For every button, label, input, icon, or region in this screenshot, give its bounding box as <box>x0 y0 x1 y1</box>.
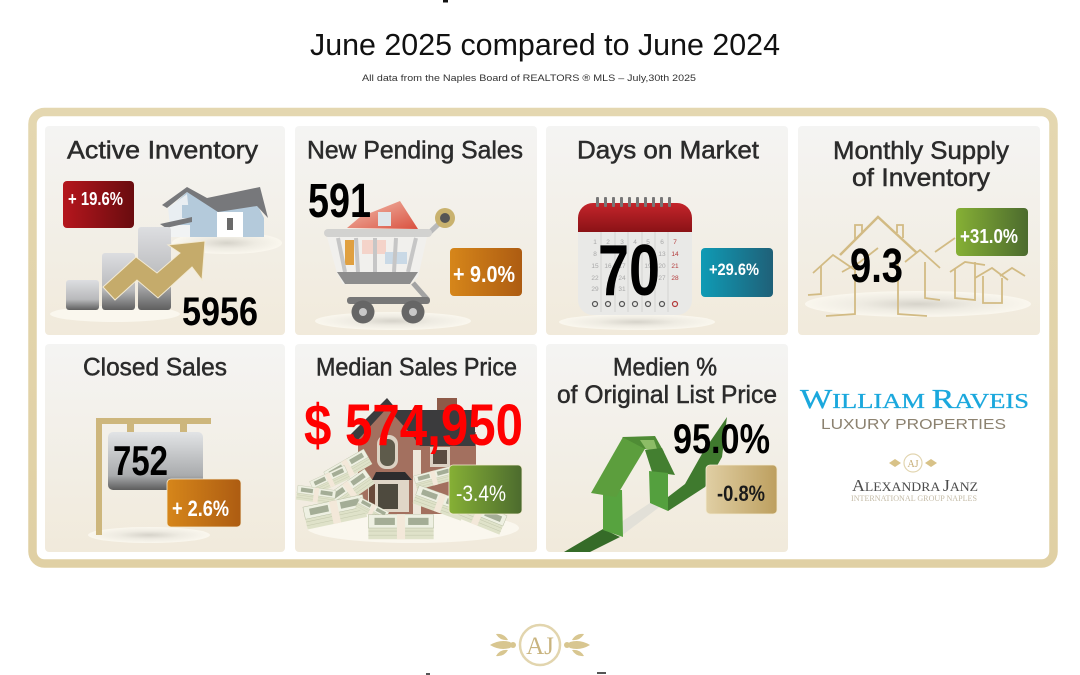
badge: change <box>167 479 241 527</box>
data source note: All data from the Naples Board of REALTORS ® MLS – July,30th 2025 <box>362 73 696 84</box>
badge: change: +29.6% <box>709 260 759 279</box>
icon: wall calendar: 28 <box>671 275 679 282</box>
badge: change: -3.4% <box>456 481 506 506</box>
logo: William Raveis: LUXURY PROPERTIES <box>821 416 1006 433</box>
title descender <box>443 0 448 2</box>
badge: change <box>63 181 134 228</box>
panel: median percent of original list price <box>546 344 788 552</box>
icon: wall calendar: 5 <box>646 239 650 246</box>
icon: wall calendar <box>559 197 715 330</box>
icon: wall calendar: 7 <box>673 239 677 246</box>
logo: Alexandra Janz: INTERNATIONAL GROUP NAPLES <box>851 494 977 503</box>
icon: wall calendar: 13 <box>658 251 666 258</box>
value: 95.0% <box>673 415 770 462</box>
value: 5956 <box>182 290 258 334</box>
logo: William Raveis <box>800 384 1029 433</box>
heading: Active Inventory <box>67 136 259 164</box>
icon: gold outlined houses <box>805 217 1031 317</box>
badge: change: -0.8% <box>717 481 765 506</box>
value: $ 574,950 <box>304 393 523 458</box>
panel: active inventory <box>45 126 285 335</box>
icon: wall calendar: 2 <box>606 239 610 246</box>
icon: wall calendar: 29 <box>591 286 599 293</box>
value: 591 <box>308 175 371 228</box>
icon: wall calendar: 20 <box>658 263 666 270</box>
icon: wall calendar: 19 <box>644 263 652 270</box>
badge: change <box>701 248 773 297</box>
icon: house with rising bars and arrow <box>50 187 282 322</box>
icon: wall calendar: 16 <box>604 263 612 270</box>
badge: change <box>956 208 1028 256</box>
icon: wall calendar: 3 <box>620 239 624 246</box>
icon: wall calendar: 27 <box>658 275 666 282</box>
value: 70 <box>598 231 660 311</box>
heading: of Original List Price <box>557 381 777 409</box>
heading: Median Sales Price <box>316 354 517 382</box>
heading: Closed Sales <box>83 354 227 382</box>
icon: green ribbon house with arrow <box>564 417 727 552</box>
logo: Alexandra Janz <box>851 454 978 503</box>
logo: AJ monogram footer: AJ <box>526 633 554 660</box>
icon: wall calendar: 21 <box>671 263 679 270</box>
badge: change: + 19.6% <box>68 189 123 209</box>
logo: Alexandra Janz: AJ <box>907 459 919 470</box>
heading: Days on Market <box>577 136 759 164</box>
logo: Alexandra Janz: ALEXANDRA JANZ <box>852 476 978 495</box>
icon: brick house with cash stacks <box>296 398 519 543</box>
icon: wall calendar: 4 <box>633 239 637 246</box>
footer text tops <box>426 672 606 675</box>
subtitle: comparison period: June 2025 compared to June 2024 <box>310 28 780 62</box>
badge: change <box>450 248 522 296</box>
badge: change: + 9.0% <box>453 261 515 287</box>
icon: wall calendar: 8 <box>593 251 597 258</box>
badge: change <box>706 465 777 514</box>
icon: hanging sign post <box>88 418 211 543</box>
icon: wall calendar: 15 <box>591 263 599 270</box>
value: 752 <box>113 437 168 484</box>
icon: shopping cart with house <box>315 201 471 330</box>
logo: William Raveis: W ILLIAM RAVEIS <box>800 384 1029 414</box>
heading <box>557 354 777 409</box>
logo: AJ monogram footer <box>490 625 590 665</box>
icon: wall calendar: 1 <box>593 239 597 246</box>
heading: of Inventory <box>852 164 991 192</box>
icon: wall calendar: 14 <box>671 251 679 258</box>
panel: closed sales <box>45 344 285 552</box>
heading: Medien % <box>613 354 717 382</box>
heading: New Pending Sales <box>307 136 523 164</box>
icon: wall calendar: 22 <box>591 275 599 282</box>
heading <box>833 137 1009 192</box>
icon: wall calendar: 17 <box>618 263 626 270</box>
icon: wall calendar: 31 <box>618 286 626 293</box>
icon: wall calendar: 24 <box>618 275 626 282</box>
panel: new pending sales <box>295 126 537 335</box>
panel: days on market <box>546 126 788 335</box>
heading: Monthly Supply <box>833 137 1009 165</box>
panel: monthly supply of inventory <box>798 126 1040 335</box>
value: 9.3 <box>850 240 903 293</box>
badge: change: +31.0% <box>960 226 1018 248</box>
badge: change: + 2.6% <box>172 496 229 521</box>
outer gold frame panel <box>32 112 1054 564</box>
icon: wall calendar: 6 <box>660 239 664 246</box>
panel: median sales price <box>295 344 537 552</box>
badge: change <box>449 465 522 514</box>
